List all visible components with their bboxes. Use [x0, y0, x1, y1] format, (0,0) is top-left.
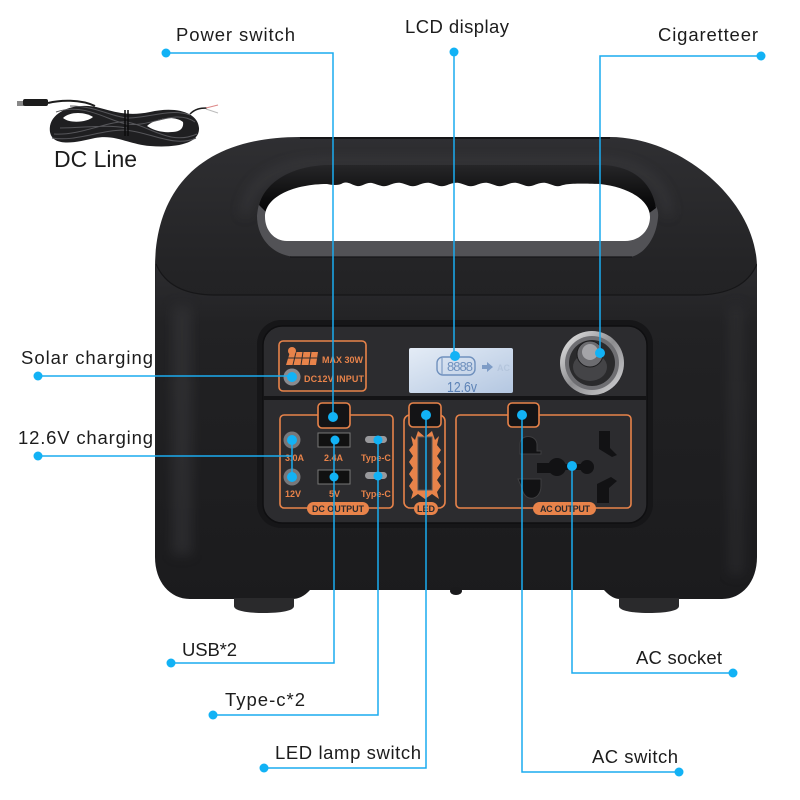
LCD display: AC — [497, 363, 510, 373]
panel: DC output: Type-C — [361, 453, 391, 463]
panel: solar input: MAX 30W — [322, 355, 364, 365]
callout: AC socket: AC socket — [636, 647, 722, 668]
control panel — [257, 320, 653, 528]
callout: Solar charging: Solar charging — [21, 347, 153, 368]
panel: DC output: 5V — [329, 489, 340, 499]
panel: AC output: AC OUTPUT — [540, 504, 590, 514]
callout: Power switch: Power switch — [176, 24, 295, 45]
panel: DC output: 2.4A — [324, 453, 344, 463]
callout: Type-c*2: Type-c*2 — [225, 689, 305, 710]
callout: AC socket — [567, 461, 738, 678]
callout: Type-c*2 — [208, 436, 382, 720]
callout: 12.6V charging — [18, 427, 297, 482]
panel: solar input: DC12V INPUT — [304, 374, 364, 384]
panel: DC output: Type-C — [361, 489, 391, 499]
panel: LED: LED — [417, 504, 436, 514]
LCD display: 8888 — [447, 359, 473, 374]
callout: USB*2 — [166, 436, 340, 668]
device feet — [234, 598, 679, 613]
callout: LCD display — [405, 16, 510, 361]
panel: DC output — [280, 403, 393, 515]
callout: LED lamp switch: LED lamp switch — [275, 742, 421, 763]
callout: 12.6V charging: 12.6V charging — [18, 427, 153, 448]
callout: Cigaretteer — [595, 24, 766, 358]
panel: LED — [404, 403, 445, 515]
heading: DC Line: DC Line — [54, 146, 137, 172]
icon: cigarette socket — [560, 331, 624, 395]
panel: solar input — [279, 341, 366, 391]
callout: LCD display: LCD display — [405, 16, 510, 37]
callout: AC switch — [517, 410, 684, 776]
panel: DC output: 12V — [285, 489, 301, 499]
LCD display — [409, 348, 513, 396]
callout: Solar charging — [21, 347, 297, 382]
callout: Power switch — [162, 24, 338, 422]
panel: DC output: DC OUTPUT — [312, 504, 364, 514]
callout: Cigaretteer: Cigaretteer — [658, 24, 758, 45]
panel: DC output: 3.0A — [285, 453, 305, 463]
LCD display: 12.6v — [447, 379, 477, 396]
device body — [155, 137, 757, 599]
handle opening — [265, 182, 650, 241]
panel: AC output — [456, 403, 631, 515]
callout: LED lamp switch — [260, 410, 431, 772]
callout: USB*2: USB*2 — [182, 639, 237, 660]
callout: AC switch: AC switch — [592, 746, 678, 767]
icon: DC line cable — [17, 99, 218, 146]
